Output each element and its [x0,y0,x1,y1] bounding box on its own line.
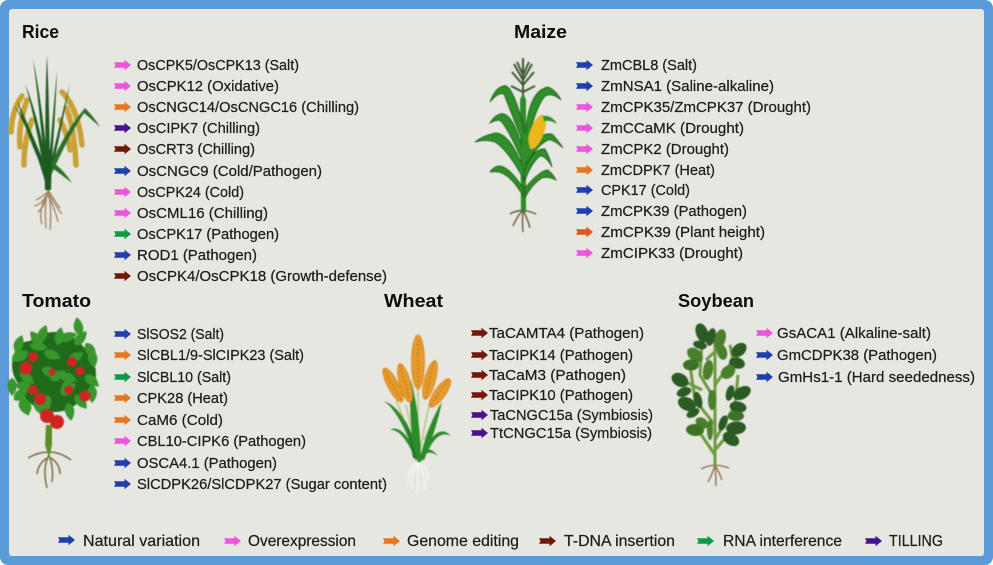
row: GsACA1 (Alkaline-salt) [777,325,931,342]
row: SlCBL10 (Salt) [137,369,231,386]
legend item: TILLING [865,533,943,550]
panel: maize [475,22,811,262]
row: TaCaM3 (Pathogen) [489,367,626,384]
gene list: soybean [756,325,975,386]
row: SlCDPK26/SlCDPK27 (Sugar content) [137,476,387,493]
heading: Wheat: Wheat [384,291,443,311]
legend item: RNA interference: RNA interference [723,533,842,550]
row: OsCPK24 (Cold) [137,184,244,201]
row: OsCPK5/OsCPK13 (Salt) [137,57,299,74]
heading: Rice: Rice [22,22,59,42]
row: OsCRT3 (Chilling) [137,141,255,158]
row: OSCA4.1 (Pathogen) [137,455,277,472]
panel: soybean [669,291,975,486]
panel: tomato [8,291,387,493]
legend item: overexpression: Overexpression [248,533,356,550]
gene list: tomato [114,326,387,493]
icon: soybean plant [669,322,753,486]
row: ZmCPK35/ZmCPK37 (Drought) [601,99,811,116]
row: ZmCCaMK (Drought) [601,120,744,137]
row: ZmCPK39 (Pathogen) [601,203,747,220]
panel: wheat [379,291,653,492]
row: OsCPK4/OsCPK18 (Growth-defense) [137,268,387,285]
legend [58,533,943,550]
icon: maize plant [475,58,563,232]
row: TtCNGC15a (Symbiosis) [490,425,652,442]
legend item: genome editing: Genome editing [407,533,519,550]
row: SlSOS2 (Salt) [137,326,224,343]
row: OsCPK12 (Oxidative) [137,78,279,95]
row: CaM6 (Cold) [137,412,223,429]
row: TaCIPK10 (Pathogen) [489,387,633,404]
gene list: wheat [471,325,653,442]
row: ZmCDPK7 (Heat) [601,162,715,179]
row: ZmCPK2 (Drought) [601,141,729,158]
gene list: rice [114,57,387,285]
icon: wheat plant [379,335,454,492]
row: ZmCBL8 (Salt) [601,57,697,74]
row: SlCBL1/9-SlCIPK23 (Salt) [137,347,304,364]
row: ZmCIPK33 (Drought) [601,245,743,262]
icon: tomato plant [8,316,102,488]
row: CPK28 (Heat) [137,390,228,407]
legend item: TILLING: TILLING [889,533,943,550]
row: OsCNGC14/OsCNGC16 (Chilling) [137,99,359,116]
row: OsCML16 (Chilling) [137,205,268,222]
panel: rice [11,22,387,285]
row: OsCIPK7 (Chilling) [137,120,260,137]
legend item: natural variation: Natural variation [83,533,200,550]
row: GmCDPK38 (Pathogen) [777,347,937,364]
heading: Maize: Maize [514,22,567,42]
heading: Tomato: Tomato [22,291,91,311]
icon: rice plant [11,55,100,230]
heading: Soybean: Soybean [678,291,754,311]
row: ZmCPK39 (Plant height) [601,224,765,241]
row: TaCAMTA4 (Pathogen) [489,325,644,342]
gene list: maize [576,57,811,262]
row: TaCNGC15a (Symbiosis) [490,407,653,424]
row: OsCNGC9 (Cold/Pathogen) [137,163,322,180]
row: ZmNSA1 (Saline-alkaline) [601,78,774,95]
row: GmHs1-1 (Hard seededness) [778,369,975,386]
legend item: T-DNA insertion: T-DNA insertion [564,533,675,550]
row: CPK17 (Cold) [601,182,690,199]
row: CBL10-CIPK6 (Pathogen) [137,433,306,450]
row: OsCPK17 (Pathogen) [137,226,279,243]
row: TaCIPK14 (Pathogen) [489,347,633,364]
row: ROD1 (Pathogen) [137,247,257,264]
